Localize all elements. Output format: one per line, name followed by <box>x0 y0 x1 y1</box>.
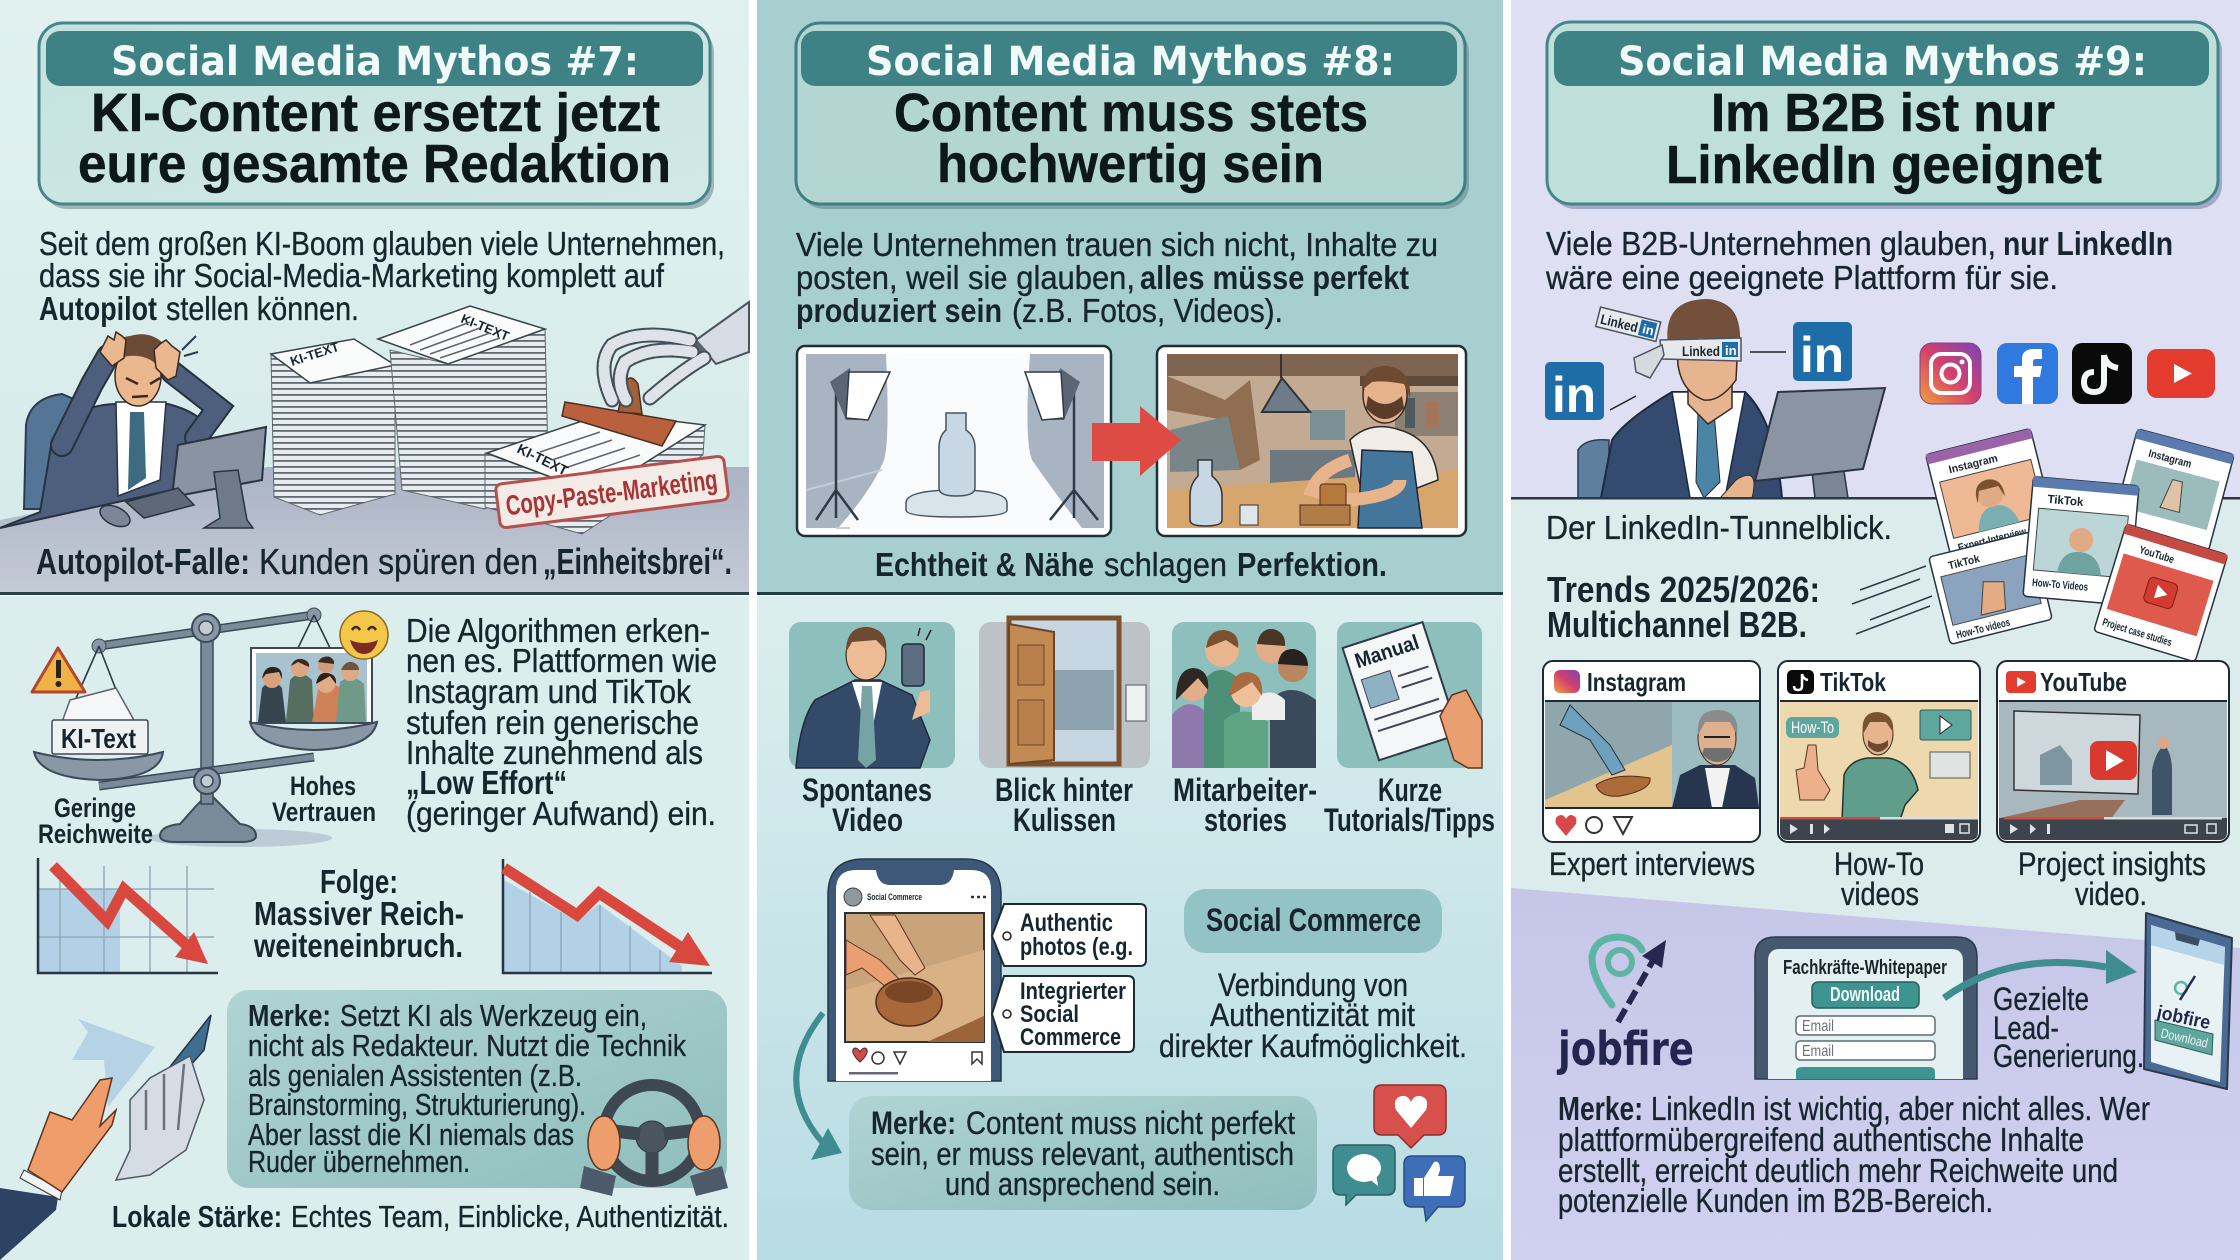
caption: Autopilot-Falle <box>36 541 732 582</box>
scale labels: Reichweite <box>38 819 153 849</box>
mini card: Instagram left: Instagram <box>1948 452 1999 476</box>
card: TikTok how-to: How-To <box>1791 718 1834 737</box>
labels: platform formats: videos <box>1841 876 1919 912</box>
callout: Merke 7 <box>227 990 727 1188</box>
icon: LinkedIn right <box>1750 322 1852 383</box>
title box 7 <box>39 23 714 209</box>
text: Merke 9: Merke: <box>1558 1090 1643 1127</box>
computer monitor <box>1755 388 1885 498</box>
card: YouTube project insights <box>1997 661 2229 842</box>
callout: Merke 8: Merke: <box>871 1105 956 1141</box>
mini card: Instagram right: Instagram <box>2147 448 2193 471</box>
illustration: KI-Text paper stacks: KI-TEXT <box>515 440 571 479</box>
callout: Merke 8 <box>849 1096 1317 1210</box>
icon: team stories <box>1172 622 1316 768</box>
caption: Echtheit: Perfektion. <box>1237 546 1387 583</box>
title box 7: eure gesamte Redaktion <box>78 134 671 194</box>
intro text: Viele Unternehmen trauen sich nicht, Inhalte zu <box>796 226 1438 263</box>
text: Algorithmen <box>406 612 717 832</box>
mini card: Instagram right <box>2112 429 2234 551</box>
icon: warning triangle <box>32 648 85 692</box>
logo: jobfire: jobfire <box>1556 1022 1694 1076</box>
illustration: balance scale <box>34 608 377 847</box>
panel: Mythos 9 <box>1511 0 2240 1260</box>
text: Lokale Stärke: Lokale Stärke: <box>112 1199 282 1234</box>
text: Lead-Generierung: Gezielte <box>1993 981 2089 1017</box>
blindfold with LinkedIn: in <box>1641 321 1656 338</box>
text: Algorithmen: Inhalte zunehmend als <box>406 734 703 771</box>
illustration: robot hand with stamp <box>604 302 749 400</box>
panel: Mythos 8 <box>757 0 1503 1260</box>
logo: jobfire <box>1556 937 1694 1076</box>
text: Lead-Generierung: Lead- <box>1993 1010 2059 1046</box>
blindfold with LinkedIn <box>1596 307 1741 378</box>
text: Algorithmen: stufen rein generische <box>406 704 699 741</box>
callout: Authentic photos <box>992 904 1146 966</box>
icon: TikTok <box>2072 343 2132 404</box>
text: Algorithmen: (geringer Aufwand) ein. <box>406 795 716 832</box>
blindfold with LinkedIn: in <box>1725 343 1737 358</box>
callout: Integrierter Social Commerce: Integrierter <box>1020 978 1126 1005</box>
divider <box>0 592 749 595</box>
text: Merke 9: LinkedIn ist wichtig, aber nicht alles. Wer <box>1651 1090 2150 1127</box>
phone: jobfire download: Download <box>2159 1025 2209 1051</box>
icon: like reaction <box>1404 1156 1465 1221</box>
title box 9 <box>1547 22 2222 209</box>
heading: Trends <box>1547 569 1820 645</box>
text: Folge: Massiver Reich- <box>254 895 464 932</box>
callout: Merke 7: Aber lasst die KI niemals das <box>248 1117 574 1152</box>
intro text: Viele B2B-Unternehmen glauben, <box>1546 225 1996 262</box>
ground line <box>1511 497 2240 500</box>
illustration: KI-Text paper stacks: KI-TEXT <box>288 339 341 369</box>
labels: platform formats: Project insights <box>2018 846 2206 882</box>
labels: content formats: Kulissen <box>1013 802 1116 838</box>
title box 8: hochwertig sein <box>937 134 1324 194</box>
text: Algorithmen: Instagram und TikTok <box>406 673 691 710</box>
icon: heart reaction <box>1374 1085 1446 1148</box>
labels: platform formats <box>1549 846 2206 912</box>
callout: Merke 7: Setzt KI als Werkzeug ein, <box>340 998 647 1033</box>
text: Lead-Generierung: Generierung. <box>1993 1038 2144 1074</box>
labels: platform formats: video. <box>2075 876 2147 912</box>
callout: Merke 7: als genialen Assistenten (z.B. <box>248 1058 582 1093</box>
icon: Instagram <box>1920 343 1981 404</box>
labels: content formats: stories <box>1204 802 1287 838</box>
labels: content formats: Kurze <box>1378 772 1442 808</box>
callout: Merke 7: Brainstorming, Strukturierung). <box>248 1087 586 1122</box>
illustration: stressed businessman at computer <box>0 332 266 531</box>
labels: content formats <box>802 772 1495 838</box>
labels: platform formats: Expert interviews <box>1549 846 1755 882</box>
intro text: stellen können. <box>166 290 359 327</box>
text: Algorithmen: nen es. Plattformen wie <box>406 642 717 679</box>
arrow: red right <box>1092 406 1181 476</box>
text: Merke 9: plattformübergreifend authentische Inhalte <box>1558 1121 2084 1158</box>
intro text: produziert sein <box>796 292 1002 329</box>
text: Verbindung: Authentizität mit <box>1210 997 1415 1033</box>
callout: Merke 8: sein, er muss relevant, authentisch <box>871 1136 1294 1172</box>
mini card: Instagram left <box>1926 429 2056 559</box>
intro text: posten, weil sie glauben, <box>796 259 1135 296</box>
text: Lokale Stärke <box>112 1199 729 1234</box>
labels: platform formats: How-To <box>1834 846 1924 882</box>
chart: falling reach right <box>503 859 712 973</box>
text: Algorithmen: „Low Effort“ <box>406 764 567 801</box>
text: Verbindung: Verbindung von <box>1218 967 1408 1003</box>
text: Folge <box>253 863 464 964</box>
scale labels: Vertrauen <box>272 797 376 827</box>
tablet: whitepaper landing page: Fachkräfte-Whitepaper <box>1783 957 1947 979</box>
chart: falling reach left <box>38 858 218 973</box>
desk surface <box>0 467 749 592</box>
scale labels <box>38 771 376 849</box>
card: YouTube project insights: YouTube <box>2040 667 2127 697</box>
intro text <box>796 226 1438 329</box>
text: Merke 9: erstellt, erreicht deutlich mehr Reichweite und <box>1558 1152 2118 1189</box>
card: TikTok how-to <box>1778 661 1980 842</box>
caption: Autopilot-Falle: „Einheitsbrei“. <box>543 541 732 582</box>
title box 7: KI-Content ersetzt jetzt <box>91 83 660 143</box>
card: Instagram expert interviews: Instagram <box>1587 667 1686 697</box>
KI-Text pile: KI-Text <box>61 723 136 754</box>
photo: team <box>251 648 372 723</box>
mini card: TikTok center: TikTok <box>2047 492 2084 509</box>
illustration: human hand and robot hand <box>0 1015 211 1260</box>
text: Tunnelblick: Der LinkedIn-Tunnelblick. <box>1546 509 1892 546</box>
icon: manual: Manual <box>1352 631 1422 673</box>
intro text: Seit dem großen KI-Boom glauben viele Unternehmen, <box>39 225 725 262</box>
tablet: whitepaper landing page: Download <box>1830 984 1900 1006</box>
illustration: KI-Text paper stacks: KI-TEXT <box>459 311 511 344</box>
scale labels: Geringe <box>54 793 136 823</box>
mini card: YouTube: Project case studies <box>2101 617 2173 649</box>
text: Verbindung <box>1159 967 1467 1064</box>
labels: content formats: Tutorials/Tipps <box>1324 802 1495 838</box>
mini card: Instagram left: Expert-Interview <box>1957 526 2028 554</box>
tablet: whitepaper landing page <box>1755 937 1977 1079</box>
text: Folge: weiteneinbruch. <box>253 927 463 964</box>
title box 8 <box>796 23 1469 209</box>
phone: social commerce post <box>828 859 1001 1081</box>
intro text: nur LinkedIn <box>2003 225 2173 262</box>
illustration: KI-Text paper stacks <box>271 306 705 534</box>
phone: jobfire download <box>2144 913 2232 1089</box>
icon: spontaneous video <box>789 622 955 768</box>
labels: content formats: Spontanes <box>802 772 932 808</box>
labels: content formats: Mitarbeiter- <box>1173 772 1317 808</box>
pill: Social Commerce: Social Commerce <box>1206 902 1421 938</box>
mini card: YouTube <box>2094 524 2228 662</box>
callout: Merke 8: Content muss nicht perfekt <box>966 1105 1295 1141</box>
intro text: Autopilot <box>39 290 157 327</box>
title box 9: Im B2B ist nur <box>1711 83 2055 143</box>
icon: steering wheel with hands <box>580 1085 728 1196</box>
title box 7: Social Media Mythos #7: <box>111 39 639 85</box>
icon: LinkedIn right: in <box>1800 327 1844 383</box>
arrow: lead flow <box>1944 950 2137 998</box>
callout: Merke 8: und ansprechend sein. <box>945 1166 1220 1202</box>
text: Folge: Folge: <box>320 863 398 900</box>
speed lines <box>1852 566 1932 634</box>
illustration: blindfolded businessman <box>1578 299 1782 498</box>
mini card: TikTok low left: TikTok <box>1947 553 1982 572</box>
phone: social commerce post: Social Commerce <box>867 892 922 902</box>
callout: Merke 7: nicht als Redakteur. Nutzt die Technik <box>248 1028 686 1063</box>
heading: Trends: Multichannel B2B. <box>1547 604 1807 645</box>
icon: YouTube <box>2147 349 2215 398</box>
caption: Echtheit: Echtheit & Nähe <box>875 546 1094 583</box>
blindfold with LinkedIn: Linked <box>1682 343 1720 359</box>
callout: Authentic photos: photos (e.g. <box>1020 933 1133 961</box>
blindfold with LinkedIn: Linked <box>1599 311 1640 335</box>
text: Merke 9: potenzielle Kunden im B2B-Bereich. <box>1558 1182 1993 1219</box>
callout: Merke 7: Merke: <box>248 998 331 1033</box>
card: Instagram expert interviews <box>1543 661 1760 842</box>
icon: Facebook <box>1997 343 2058 404</box>
intro text: alles müsse perfekt <box>1140 259 1409 296</box>
phone: jobfire download: jobfire <box>2154 1002 2212 1034</box>
mini card: TikTok center: How-To Videos <box>2032 577 2088 594</box>
callout: Authentic photos: Authentic <box>1020 909 1113 937</box>
title box 9: LinkedIn geeignet <box>1666 135 2102 195</box>
intro text <box>39 225 725 327</box>
text: Algorithmen: Die Algorithmen erken- <box>406 612 710 649</box>
pill: Social Commerce <box>1184 889 1442 953</box>
caption: Echtheit <box>875 546 1387 583</box>
icon: LinkedIn left: in <box>1552 367 1596 423</box>
intro text: (z.B. Fotos, Videos). <box>1012 292 1283 329</box>
labels: content formats: Blick hinter <box>995 772 1133 808</box>
callout: Integrierter Social Commerce: Commerce <box>1020 1024 1121 1051</box>
text: Verbindung: direkter Kaufmöglichkeit. <box>1159 1028 1467 1064</box>
caption: Echtheit: schlagen <box>1104 546 1227 583</box>
scale labels: Hohes <box>290 771 356 801</box>
photo: authentic workshop <box>1157 346 1466 536</box>
intro text: dass sie ihr Social-Media-Marketing komplett auf <box>39 257 665 294</box>
title box 9: Social Media Mythos #9: <box>1618 39 2147 85</box>
icon: manual <box>1337 622 1482 768</box>
mini card: YouTube: YouTube <box>2138 544 2176 566</box>
photo: studio product shot <box>797 346 1111 536</box>
callout: Merke 7: Ruder übernehmen. <box>248 1144 470 1179</box>
tablet: whitepaper landing page: Email <box>1802 1018 1834 1035</box>
stamp: Copy-Paste-Marketing: Copy-Paste-Marketing <box>504 464 719 521</box>
KI-Text pile <box>52 688 148 754</box>
arrow: curved teal <box>796 1013 842 1160</box>
title box 8: Social Media Mythos #8: <box>866 39 1395 85</box>
text: Lead-Generierung <box>1993 981 2144 1074</box>
callout: Integrierter Social Commerce: Social <box>1020 1001 1079 1028</box>
title box 8: Content muss stets <box>894 83 1368 143</box>
heading: Trends: Trends 2025/2026: <box>1547 569 1820 610</box>
mini card: TikTok low left: How-To videos <box>1955 617 2011 642</box>
mini card: TikTok center <box>2023 477 2139 605</box>
labels: content formats: Video <box>832 802 903 838</box>
caption: Autopilot-Falle: Autopilot-Falle: <box>36 541 250 582</box>
icon: smiling emoji <box>340 611 388 659</box>
icon: door behind the scenes <box>979 618 1150 768</box>
text: Lokale Stärke: Echtes Team, Einblicke, Authentizität. <box>291 1199 729 1234</box>
icon: LinkedIn left <box>1545 362 1636 423</box>
mini card: TikTok low left <box>1929 532 2052 644</box>
caption: Autopilot-Falle: Kunden spüren den <box>259 541 538 582</box>
stamp: Copy-Paste-Marketing <box>495 456 729 528</box>
text: Merke 9 <box>1558 1090 2150 1219</box>
callout: Integrierter Social Commerce <box>992 976 1134 1052</box>
card: TikTok how-to: TikTok <box>1820 667 1886 697</box>
icon: comment reaction <box>1333 1145 1395 1205</box>
panel: Mythos 7 <box>0 0 749 1260</box>
intro text <box>1545 225 2173 296</box>
tablet: whitepaper landing page: Email <box>1802 1043 1834 1060</box>
intro text: wäre eine geeignete Plattform für sie. <box>1545 259 2058 296</box>
mini cards: social platforms <box>1926 429 2234 662</box>
